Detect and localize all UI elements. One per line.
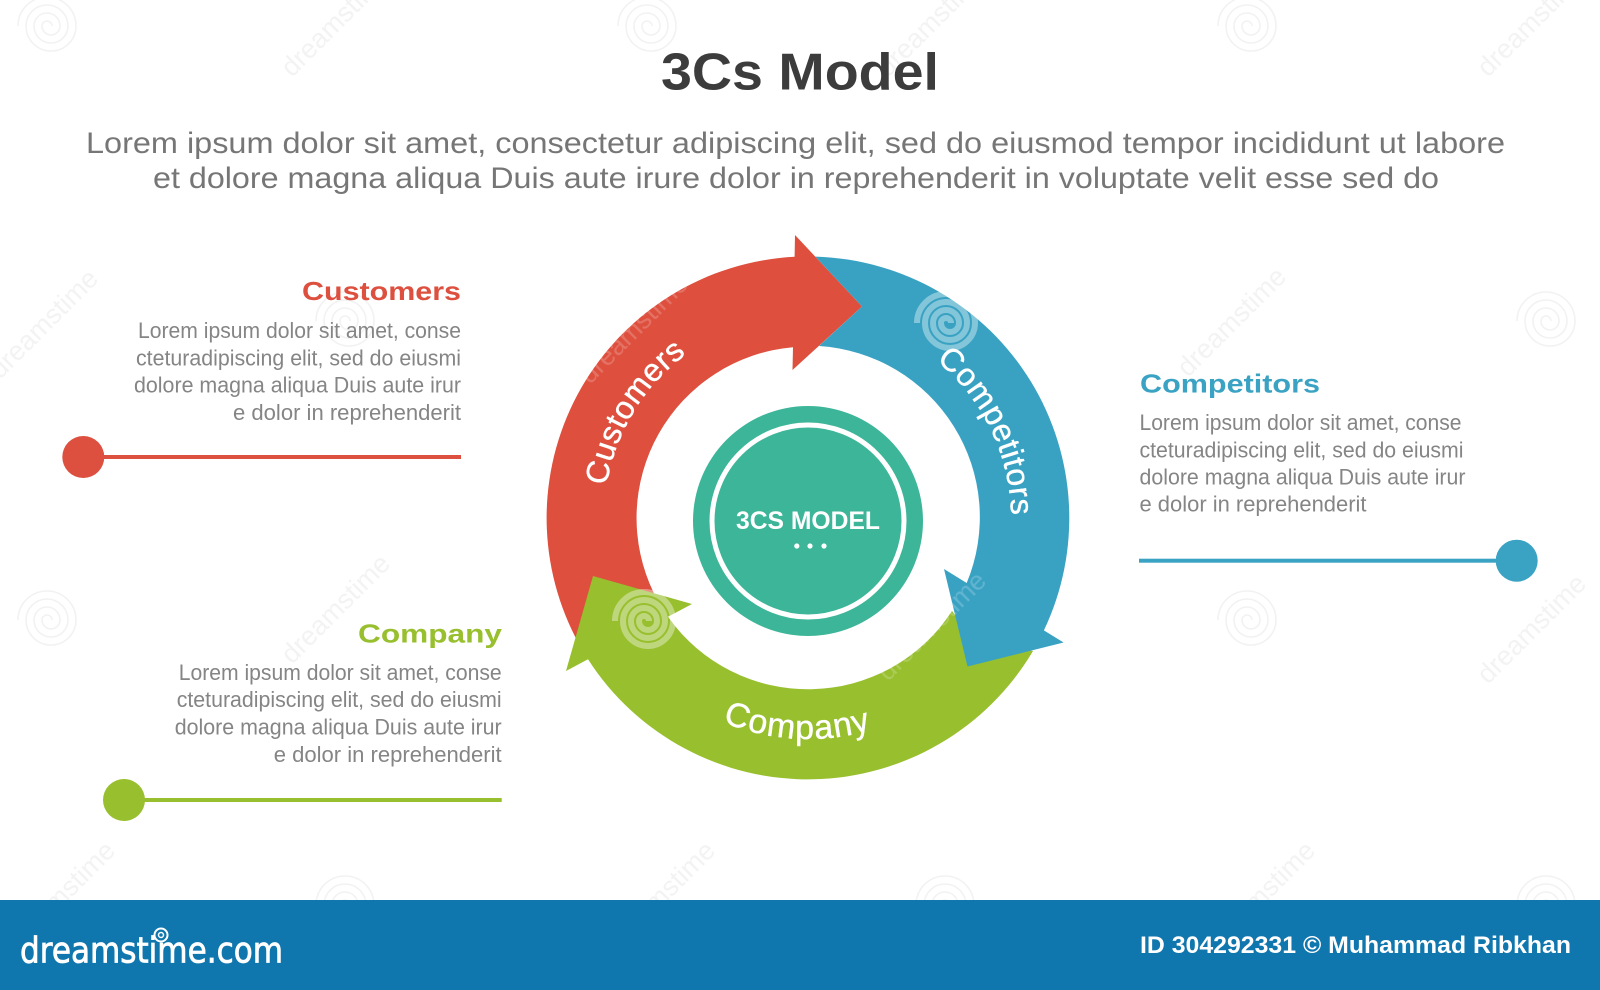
panel: company — [103, 618, 503, 821]
text: dreamstime — [1471, 568, 1592, 689]
panel: customers — [62, 276, 462, 478]
text block: competitors: Lorem ipsum dolor sit amet, conse — [1140, 410, 1462, 435]
text block: customers: Lorem ipsum dolor sit amet, conse — [138, 318, 461, 343]
text block: competitors — [1140, 410, 1466, 517]
text block: customers: cteturadipiscing elit, sed do eiusmi — [136, 346, 461, 370]
text: dreamstime — [573, 268, 694, 389]
text block: company: cteturadipiscing elit, sed do eiusmi — [177, 687, 502, 712]
description: et dolore magna aliqua Duis aute irure dolor in reprehenderit in voluptate velit esse sed do — [153, 162, 1439, 195]
text: dreamstime — [0, 835, 121, 956]
description: Lorem ipsum dolor sit amet, consectetur adipiscing elit, sed do eiusmod tempor incididunt ut labore — [86, 127, 1505, 160]
text block: customers — [134, 318, 462, 425]
text block: competitors: cteturadipiscing elit, sed do eiusmi — [1140, 437, 1464, 462]
center circle: 3CS MODEL — [736, 507, 880, 535]
arrow: customers — [547, 235, 862, 638]
footer band — [0, 900, 1600, 990]
arrow: company — [566, 576, 1033, 779]
label: customers: Customers — [586, 343, 684, 482]
label: competitors: Competitors — [941, 348, 1028, 514]
text block: company — [175, 660, 502, 767]
description — [86, 127, 1505, 195]
text: dreamstime — [600, 835, 721, 956]
text block: company: e dolor in reprehenderit — [274, 742, 502, 767]
text block: company: Lorem ipsum dolor sit amet, conse — [179, 660, 502, 685]
label: company: Company — [726, 703, 867, 746]
text block: customers: dolore magna aliqua Duis aute irur — [134, 373, 461, 398]
text block: customers: e dolor in reprehenderit — [233, 400, 462, 425]
connector: competitors — [1139, 540, 1538, 582]
heading: company: Company — [358, 618, 503, 648]
cycle diagram — [546, 235, 1070, 780]
connector: customers — [62, 436, 461, 478]
credit: ID 304292331 © Muhammad Ribkhan — [1140, 932, 1571, 959]
text block: competitors: e dolor in reprehenderit — [1140, 492, 1367, 517]
panel: competitors — [1139, 369, 1538, 582]
center circle — [693, 406, 923, 636]
logo: dreamstime.com: dreamstime.com — [20, 930, 283, 972]
connector: company — [103, 779, 502, 821]
arrow: competitors — [815, 257, 1069, 666]
heading: customers: Customers — [302, 276, 461, 306]
text: dreamstime — [1171, 261, 1292, 382]
text: dreamstime — [275, 548, 396, 669]
text block: competitors: dolore magna aliqua Duis aute irur — [1140, 464, 1466, 489]
title: 3Cs Model — [661, 44, 939, 102]
heading: competitors: Competitors — [1140, 369, 1320, 399]
text: dreamstime — [1200, 835, 1321, 956]
text: dreamstime — [871, 565, 992, 686]
text block: company: dolore magna aliqua Duis aute irur — [175, 714, 502, 740]
